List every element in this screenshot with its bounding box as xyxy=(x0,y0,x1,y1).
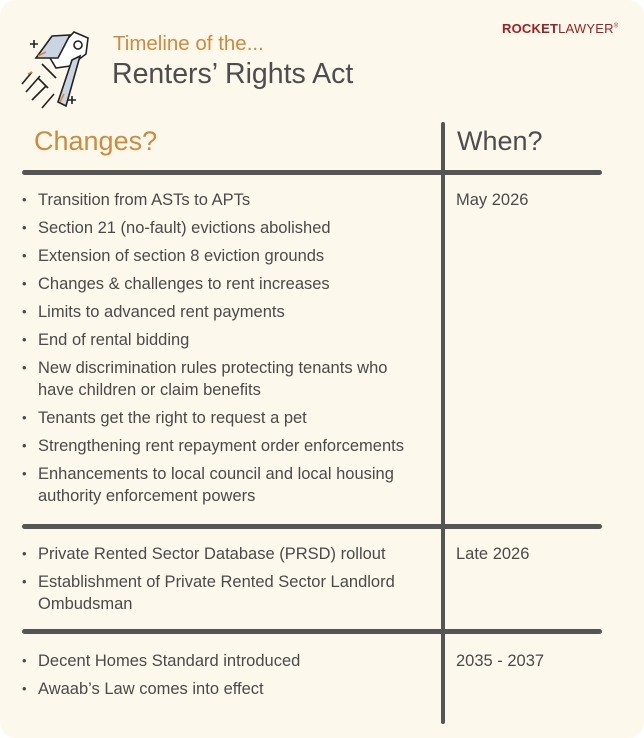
list: May 2026 changes: Transition from ASTs to APTs xyxy=(38,191,250,209)
date: Late 2026: Late 2026 xyxy=(456,545,529,563)
list: May 2026 changes: Limits to advanced rent payments xyxy=(38,303,285,321)
list: May 2026 changes: Tenants get the right to request a pet xyxy=(38,409,307,427)
list: 2035-2037 changes xyxy=(22,652,300,698)
list: 2035-2037 changes: Decent Homes Standard introduced xyxy=(38,652,300,670)
list: Late 2026 changes: Ombudsman xyxy=(38,595,132,613)
heading: changes: Changes? xyxy=(34,126,157,156)
list: Late 2026 changes: Establishment of Private Rented Sector Landlord xyxy=(38,573,395,591)
list: May 2026 changes xyxy=(22,191,404,505)
list: 2035-2037 changes: Awaab’s Law comes into effect xyxy=(38,680,264,698)
list: Late 2026 changes: Private Rented Sector Database (PRSD) rollout xyxy=(38,545,386,563)
list: May 2026 changes: Changes & challenges to rent increases xyxy=(38,275,330,293)
logo: ROCKETLAWYER® xyxy=(502,21,618,36)
list: May 2026 changes: authority enforcement powers xyxy=(38,487,255,505)
list: May 2026 changes: New discrimination rules protecting tenants who xyxy=(38,359,387,377)
heading: when: When? xyxy=(457,126,543,156)
list: Late 2026 changes xyxy=(22,545,395,613)
list: May 2026 changes: Enhancements to local council and local housing xyxy=(38,465,394,483)
list: May 2026 changes: Extension of section 8 eviction grounds xyxy=(38,247,324,265)
title: Renters’ Rights Act xyxy=(112,58,353,90)
list: May 2026 changes: Section 21 (no-fault) evictions abolished xyxy=(38,219,331,237)
subtitle: Timeline of the... xyxy=(113,32,264,55)
date: May 2026: May 2026 xyxy=(456,191,528,209)
list: May 2026 changes: End of rental bidding xyxy=(38,331,189,349)
list: May 2026 changes: Strengthening rent repayment order enforcements xyxy=(38,437,404,455)
icon: rocket xyxy=(22,31,89,108)
list: May 2026 changes: have children or claim benefits xyxy=(38,381,261,399)
date: 2035-2037: 2035 - 2037 xyxy=(456,652,544,670)
